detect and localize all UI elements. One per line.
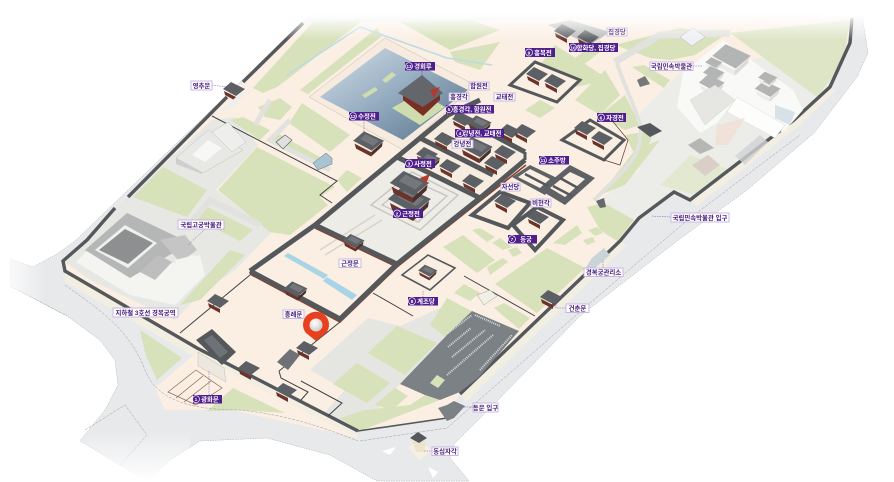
label 11: Sojubang: 11 — [540, 158, 546, 164]
fade: left — [0, 250, 45, 310]
label 10: Hamhwadang and Jipgyeongdang — [569, 43, 618, 52]
north-west museum grounds — [65, 117, 272, 320]
fade: top — [0, 0, 894, 40]
label 3: Sajeongjeon: 3 — [408, 161, 411, 167]
compound: Heungbokjeon — [510, 62, 580, 102]
royal residence courtyard — [397, 115, 525, 198]
label: National Palace Museum — [178, 220, 224, 229]
Heungnyemun gate — [284, 281, 308, 301]
label: Hamwonjeon: 함원전 — [470, 81, 488, 90]
outer palace wall — [63, 18, 852, 431]
label: Bihyeongak: 비현각 — [532, 198, 550, 207]
label: Gyotaejeon — [494, 92, 515, 101]
label: Jaseondang: 자선당 — [502, 182, 519, 191]
label 3: Sajeongjeon — [405, 159, 435, 168]
label: Jipgyeongdang — [607, 27, 627, 36]
east museum grounds — [600, 40, 845, 225]
compound: Donggung — [472, 192, 563, 250]
Geunjeongjeon hall — [388, 171, 431, 221]
Gwanghwamun plaza and lawns — [140, 330, 358, 438]
label 13: Gyeonghoeru — [405, 62, 435, 70]
palace walls — [250, 100, 526, 322]
label 1: Gwanghwamun: 1 — [195, 397, 198, 403]
Geonchunmun gate — [540, 290, 562, 309]
label 9: Heungbokjeon: 흥복전 — [534, 48, 552, 57]
label: Heungnyemun — [283, 310, 304, 318]
Gyejodang hall — [402, 255, 455, 290]
label 13: Gyeonghoeru: 경회루 — [414, 62, 432, 70]
north-west museum buildings — [176, 122, 246, 174]
road markings — [10, 135, 800, 465]
National Folk Museum — [677, 28, 803, 176]
Dongsipjagak tower — [382, 432, 438, 478]
label: subway station: 지하철 3호선 경복궁역 — [115, 308, 176, 317]
label 8: Gyejodang: 계조당 — [417, 296, 435, 306]
label: Heunggyeonggak: 흥경각 — [450, 92, 468, 101]
label: Geunjeongmun — [339, 258, 361, 268]
label: management office: 경복궁관리소 — [586, 268, 621, 276]
label 6: Jagyeongjeon: 6 — [600, 115, 603, 121]
label 3: Sajeongjeon: 사정전 — [414, 159, 432, 168]
label 2: Geunjeongjeon: 2 — [396, 211, 399, 217]
lawns — [133, 20, 850, 431]
label: Geonchunmun — [566, 304, 589, 312]
label: Geunjeongmun: 근정문 — [341, 258, 359, 268]
south-east grey ground — [310, 305, 447, 431]
label 6: Jagyeongjeon: 자경전 — [606, 113, 624, 122]
label 8: Gyejodang — [408, 296, 438, 306]
label 9: Heungbokjeon — [525, 48, 555, 57]
Geunjeongjeon platform — [371, 172, 458, 230]
Yeongchumun gate — [222, 82, 250, 110]
label 1: Gwanghwamun: 광화문 — [201, 394, 219, 404]
parking lot — [400, 311, 519, 400]
outer wall cream bands — [65, 87, 836, 438]
stream — [287, 27, 492, 75]
label 1: Gwanghwamun — [192, 394, 222, 404]
Gyeonghoeru pavilion — [392, 70, 445, 125]
label: Folk Museum entrance: 국립민속박물관 입구 — [673, 213, 727, 222]
label 10: Hamhwadang and Jipgyeongdang: 함화당, 집경당 — [577, 43, 616, 52]
label: Yeongchumun: 영추문 — [193, 81, 210, 90]
label 2: Geunjeongjeon — [393, 209, 423, 218]
label 12: Sujeongjeon: 12 — [350, 114, 356, 120]
label 7: Donggung: 동궁 — [520, 236, 532, 244]
label: Gangnyeongjeon: 강녕전 — [454, 139, 471, 148]
label 12: Sujeongjeon — [349, 112, 379, 120]
National Palace Museum — [76, 213, 205, 305]
buildings: royal residence block — [416, 112, 536, 193]
Geunjeongmun water channels — [284, 215, 382, 300]
label 9: Heungbokjeon: 9 — [528, 50, 531, 56]
Heungnyemun courtyard — [250, 225, 397, 319]
Gwanghwamun gate — [196, 329, 236, 382]
icon: red location pin — [303, 312, 329, 341]
label 12: Sujeongjeon: 수정전 — [358, 112, 376, 120]
Gyeonghoeru pond — [309, 38, 475, 150]
Sujeongjeon hall — [353, 131, 384, 157]
label 4: Gangnyeongjeon and Gyotaejeon: 강녕전, 교태전 — [463, 128, 502, 138]
Geunjeongjeon courtyard — [315, 157, 480, 264]
compound: Sojubang — [512, 165, 595, 205]
compound: Hamhwadang and Jipgyeongdang — [548, 20, 610, 49]
label: east gate entrance: 동문 입구 — [473, 403, 498, 412]
label 11: Sojubang: 소주방 — [548, 156, 566, 164]
label: Jipgyeongdang: 집경당 — [608, 27, 626, 36]
paths — [190, 33, 730, 225]
label 8: Gyejodang: 8 — [411, 299, 414, 305]
fade: bottom — [60, 430, 190, 482]
small service buildings — [276, 76, 662, 305]
label 2: Geunjeongjeon: 근정전 — [402, 209, 420, 218]
label 4: Gangnyeongjeon and Gyotaejeon — [455, 128, 504, 138]
label: Heungnyemun: 흥례문 — [285, 310, 302, 318]
leader lines — [188, 66, 703, 451]
forecourt pavilions — [207, 294, 318, 402]
label 5: Heunggyeonggak and Hamwonjeon — [446, 104, 494, 114]
east gate entrance ground — [438, 401, 465, 421]
label: Hamwonjeon — [469, 81, 489, 90]
Geunjeongmun gate — [343, 234, 364, 252]
label 5: Heunggyeonggak and Hamwonjeon: 흥경각, 함원전 — [453, 104, 492, 114]
label 13: Gyeonghoeru: 13 — [406, 64, 412, 70]
Sajeongjeon hall — [419, 152, 440, 170]
label 6: Jagyeongjeon — [597, 113, 626, 122]
inner boundary walls — [180, 116, 535, 416]
label: Heunggyeonggak — [449, 92, 469, 101]
compound: Jagyeongjeon — [562, 118, 628, 165]
palace grounds base — [63, 15, 852, 431]
label: Dongsipjagak: 동십자각 — [433, 446, 457, 456]
label 5: Heunggyeonggak and Hamwonjeon: 5 — [448, 107, 451, 113]
label 10: Hamhwadang and Jipgyeongdang: 10 — [570, 45, 576, 51]
label: Bihyeongak — [531, 198, 551, 207]
label: National Palace Museum: 국립고궁박물관 — [180, 220, 222, 229]
label: Geonchunmun: 건춘문 — [569, 304, 586, 312]
label: Gyotaejeon: 교태전 — [496, 92, 513, 101]
label 4: Gangnyeongjeon and Gyotaejeon: 4 — [459, 131, 462, 137]
label: Gangnyeongjeon — [452, 139, 473, 148]
label: National Folk Museum: 국립민속박물관 — [651, 62, 692, 70]
label 11: Sojubang — [539, 156, 569, 164]
label: Yeongchumun — [191, 81, 212, 90]
label 7: Donggung: 7 — [511, 237, 514, 243]
label 7: Donggung — [508, 235, 537, 244]
